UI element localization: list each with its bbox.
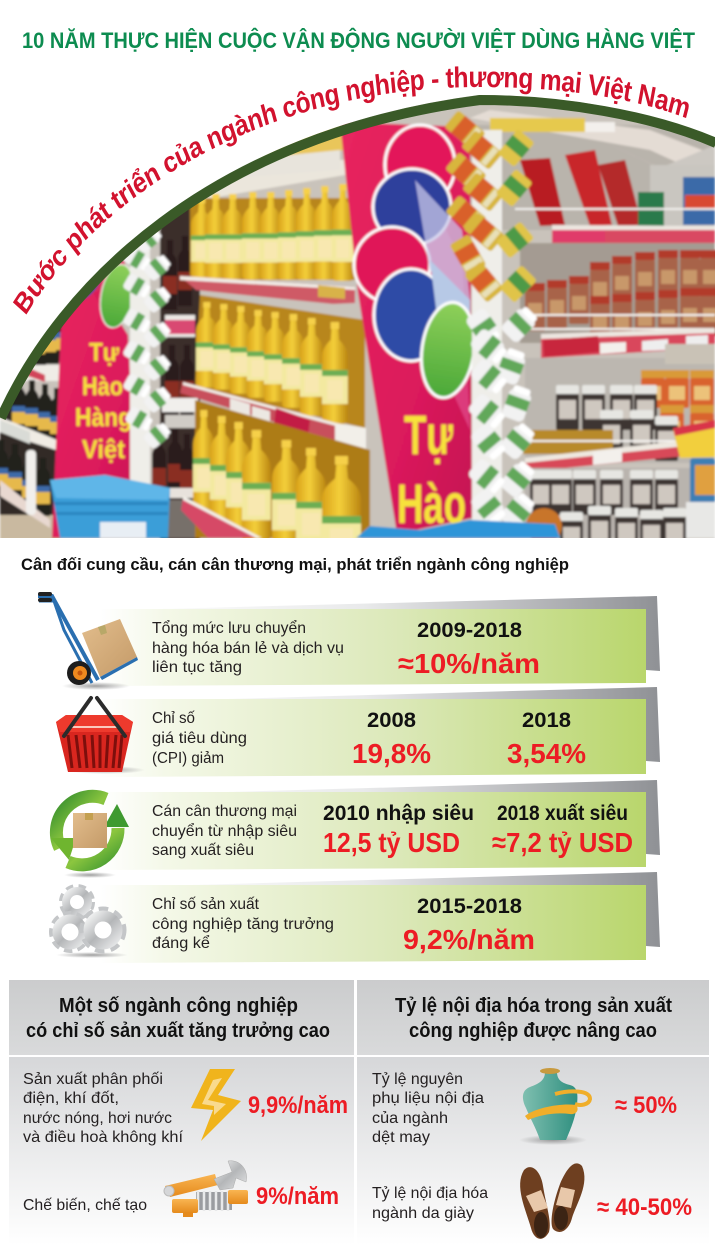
text block: liên tục tăng xyxy=(152,659,242,676)
bottom blue basket xyxy=(356,520,560,538)
stat: 2018: ≈7,2 tỷ USD xyxy=(492,827,633,858)
text block: Sản xuất phân phối xyxy=(23,1071,163,1088)
icon: leather shoes xyxy=(520,1163,584,1239)
icon: wrench and spring xyxy=(164,1161,248,1217)
icon: hand truck xyxy=(38,592,138,690)
text block: (CPI) giảm xyxy=(152,750,224,767)
shelf backdrop xyxy=(0,90,715,540)
text block xyxy=(152,803,297,859)
right top shelf xyxy=(470,110,715,243)
panel: retail turnover xyxy=(38,592,660,690)
text block: Chỉ số sản xuất xyxy=(152,896,260,913)
left banner: Tự Hào Hàng Việt: Việt xyxy=(82,434,125,464)
left blue basket xyxy=(50,475,170,538)
text block: Cán cân thương mại xyxy=(152,803,297,820)
middle shelf strip xyxy=(179,383,336,442)
upper shelf strip xyxy=(180,276,355,304)
stat: 2018: 2018 xuất siêu xyxy=(497,802,628,825)
panel: CPI xyxy=(56,687,660,777)
text block: giá tiêu dùng xyxy=(152,730,247,747)
heading: Tỷ lệ nội địa hóa trong sản xuất xyxy=(395,995,672,1017)
icon: red basket xyxy=(56,698,145,774)
left banner: Tự Hào Hàng Việt: Tự xyxy=(89,337,119,367)
big banner: Tự Hào: Hào xyxy=(397,472,466,535)
heading xyxy=(395,995,672,1042)
text block: dệt may xyxy=(372,1129,430,1146)
stat: 2018: 3,54% xyxy=(507,738,586,769)
text block xyxy=(372,1185,488,1222)
icon: gears xyxy=(52,887,128,958)
lower oil bottles xyxy=(190,398,372,538)
stat: ≈10%/năm xyxy=(398,648,540,679)
stat: 9,9%/năm xyxy=(248,1092,348,1119)
heading: Một số ngành công nghiệp xyxy=(59,995,298,1017)
section heading: Cân đối cung cầu, cán cân thương mại, phát triển ngành công nghiệp xyxy=(21,556,569,574)
stat xyxy=(403,895,535,955)
text block xyxy=(152,619,344,676)
lower shelf strip xyxy=(181,498,260,538)
stat: 2010: 12,5 tỷ USD xyxy=(323,827,460,858)
stat xyxy=(398,619,540,679)
stat: 2018: 2018 xyxy=(522,709,571,732)
text block: Tỷ lệ nội địa hóa xyxy=(372,1185,488,1202)
big banner: Tự Hào: Tự xyxy=(404,403,453,466)
text block: ngành da giày xyxy=(372,1205,474,1222)
middle oil bottles xyxy=(195,295,365,428)
stat: 2018 xyxy=(507,709,586,769)
big banner: Tự Hào xyxy=(340,122,480,535)
heading: có chỉ số sản xuất tăng trưởng cao xyxy=(26,1020,330,1042)
icon: lightning bolt xyxy=(191,1069,241,1141)
stat: 2008 xyxy=(352,709,431,769)
panel: localization rate xyxy=(357,980,709,1245)
stat: 2018 xyxy=(492,802,633,858)
stat: 2008: 2008 xyxy=(367,709,416,732)
text block: phụ liệu nội địa xyxy=(372,1090,484,1107)
right jar rows xyxy=(520,243,715,557)
stat: 2008: 19,8% xyxy=(352,738,431,769)
heading xyxy=(26,995,330,1042)
icon: mannequin with tape xyxy=(519,1068,590,1145)
stat: ≈ 40-50% xyxy=(597,1194,692,1221)
text block: chuyển từ nhập siêu xyxy=(152,822,297,840)
text block: điện, khí đốt, xyxy=(23,1090,119,1107)
text block xyxy=(23,1071,184,1146)
left banner: Tự Hào Hàng Việt: Hào xyxy=(82,371,123,401)
text block: Tỷ lệ nguyên xyxy=(372,1071,463,1088)
icon: recycle arrows with box xyxy=(51,796,129,878)
text block: công nghiệp tăng trưởng xyxy=(152,916,334,933)
green arc frame xyxy=(1,100,715,418)
white rack with hanging products, right xyxy=(444,110,540,531)
stat: 2015-2018 xyxy=(417,895,522,918)
text block xyxy=(372,1071,484,1146)
text block: hàng hóa bán lẻ và dịch vụ xyxy=(152,640,344,657)
left banner: Tự Hào Hàng Việt xyxy=(50,260,132,538)
text block: Chỉ số xyxy=(152,710,195,727)
heading: công nghiệp được nâng cao xyxy=(409,1020,657,1042)
top oil shelf xyxy=(261,126,344,158)
stat: 2009-2018 xyxy=(417,619,522,642)
text block: và điều hoà không khí xyxy=(23,1129,184,1146)
panel: high-growth industries xyxy=(9,980,354,1245)
stat: 9%/năm xyxy=(256,1183,339,1210)
text block: sang xuất siêu xyxy=(152,842,254,859)
photo: supermarket shelves xyxy=(0,95,715,538)
stat: 2010: 2010 nhập siêu xyxy=(323,802,474,825)
stat: 9,2%/năm xyxy=(403,924,535,955)
text block xyxy=(152,896,334,952)
left banner: Tự Hào Hàng Việt: Hàng xyxy=(75,402,132,432)
text block: đáng kể xyxy=(152,934,210,952)
text block: nước nóng, hơi nước xyxy=(23,1110,172,1127)
middle column: dark bottles and shelves xyxy=(152,236,198,538)
text block: Tổng mức lưu chuyển xyxy=(152,619,306,637)
text block: của ngành xyxy=(372,1110,448,1127)
stat: 2010 xyxy=(323,802,474,858)
curved headline: Bước phát triển của ngành công nghiệp - thương mại Việt Nam xyxy=(12,66,689,314)
text block: Chế biến, chế tạo xyxy=(23,1197,147,1214)
panel: industrial production xyxy=(52,872,660,963)
stat: ≈ 50% xyxy=(615,1092,677,1119)
far left shelves xyxy=(0,326,63,528)
text block xyxy=(152,710,247,767)
white rack with hanging products, left xyxy=(122,205,173,485)
panel: trade balance xyxy=(51,780,660,878)
